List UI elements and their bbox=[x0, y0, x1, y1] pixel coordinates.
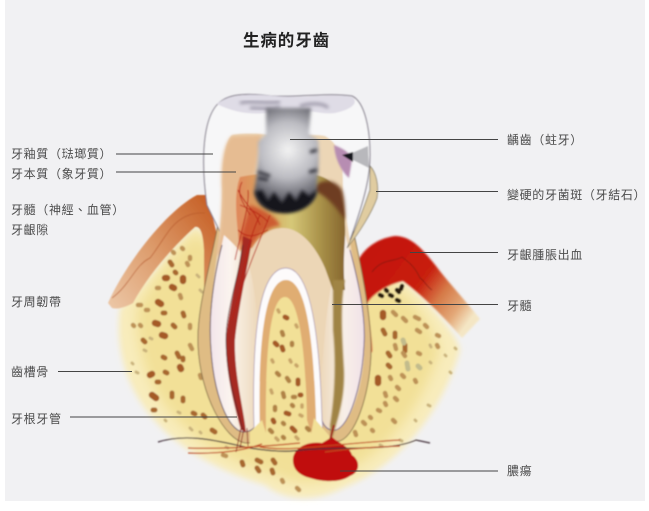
label: periodontal ligament: 牙周韌帶 bbox=[11, 294, 62, 309]
enamel biting surface bbox=[217, 95, 355, 114]
enamel outer shell bbox=[204, 94, 370, 240]
label: pulp: 牙髓（神經、血管） bbox=[11, 202, 125, 217]
tartar deposit bbox=[342, 146, 378, 248]
leader lines bbox=[58, 140, 498, 471]
label: tartar: 變硬的牙菌斑（牙結石） bbox=[507, 187, 646, 202]
label: abscess: 膿瘍 bbox=[507, 463, 532, 478]
red inflamed pulp bbox=[240, 205, 280, 248]
inflamed bone pores bbox=[380, 286, 402, 301]
enamel surface stains bbox=[240, 102, 328, 109]
left canal dark edge bbox=[226, 245, 243, 430]
right root interior bbox=[320, 235, 364, 430]
left root canal bbox=[226, 236, 252, 432]
right root outline bbox=[320, 250, 364, 430]
vessels bbox=[158, 425, 430, 453]
left labels bbox=[11, 146, 125, 426]
tooth decay cavity bbox=[254, 108, 319, 213]
label: alveolar bone: 齒槽骨 bbox=[11, 365, 49, 379]
left gum capillary bbox=[112, 213, 205, 298]
right swollen bleeding gum bbox=[353, 236, 480, 352]
tooth root outer layer bbox=[198, 195, 371, 443]
label: root canal: 牙根牙管 bbox=[11, 411, 62, 426]
abscess bbox=[293, 437, 358, 481]
title: 生病的牙齒 bbox=[243, 30, 330, 50]
right root canal bbox=[330, 280, 345, 442]
pulp chamber bbox=[236, 172, 345, 290]
label: gingival sulcus: 牙齦隙 bbox=[11, 223, 49, 237]
left pulp nerves and vessels bbox=[232, 182, 270, 320]
label: pulp: 牙髓 bbox=[507, 299, 532, 313]
alveolar bone bbox=[119, 226, 460, 498]
label: swollen gums: 牙齦腫脹出血 bbox=[507, 248, 583, 262]
left root outline bbox=[210, 245, 260, 432]
right labels bbox=[507, 133, 646, 478]
label: cavity: 齲齒（蛀牙） bbox=[507, 133, 583, 147]
label: enamel: 牙釉質（琺瑯質） bbox=[11, 146, 112, 161]
crown dentine left bbox=[216, 135, 262, 255]
tooth and jaw illustration bbox=[108, 94, 480, 498]
dentine crown and roots bbox=[211, 134, 364, 432]
inter-root arch bbox=[250, 268, 338, 448]
enamel decay patch bbox=[334, 145, 352, 178]
dark pulp top bbox=[313, 181, 345, 220]
right gum capillary bbox=[372, 257, 432, 290]
left gum bbox=[108, 195, 224, 340]
left root interior bbox=[210, 235, 260, 432]
bone pores bbox=[132, 248, 456, 490]
label: dentine: 牙本質（象牙質） bbox=[11, 166, 112, 181]
